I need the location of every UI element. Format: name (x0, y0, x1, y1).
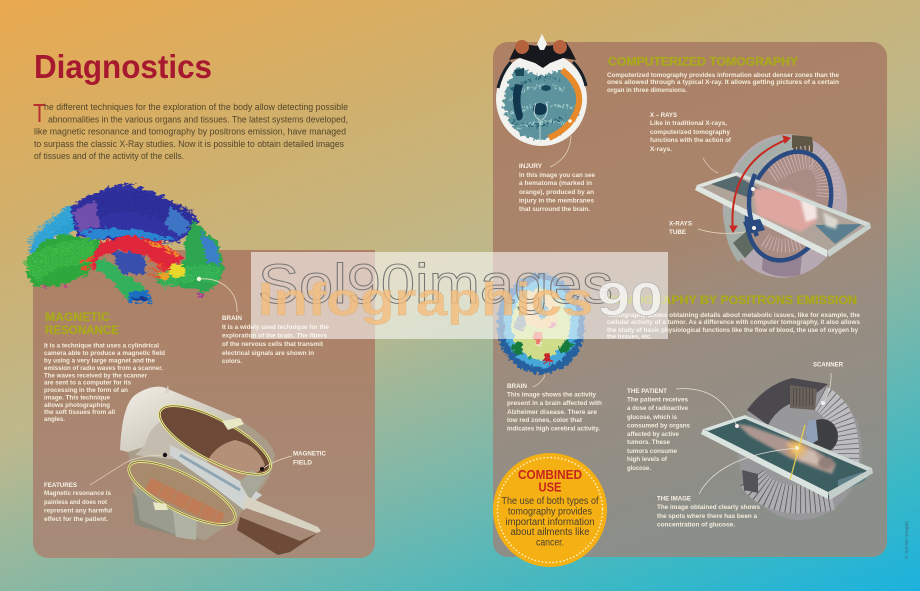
icon: CT brain scan (496, 34, 587, 146)
callout: combined use: The use of both types of (502, 496, 599, 507)
text: features: Magnetic resonance is (44, 490, 111, 497)
text: brain activity: low red zones, color that (507, 417, 583, 424)
text: the patient: consumed by organs (627, 422, 690, 430)
leader: brain activity (533, 375, 545, 387)
text: the image: The image obtained clearly shows (657, 504, 760, 511)
illustration: CT scanner (695, 126, 871, 286)
panel: magnetic resonance (33, 250, 375, 558)
text: injury: a hematoma (marked in (519, 180, 592, 187)
leader: brain (199, 279, 237, 312)
text: features: painless and does not (44, 499, 108, 506)
heading: magnetic resonance (45, 312, 119, 337)
text: the patient: tumors. These (627, 439, 670, 446)
callout: combined use: important information (506, 517, 594, 528)
text: injury (519, 163, 595, 213)
label: scanner: SCANNER (813, 362, 843, 368)
text: positrons emission description: Tomography allows obtaining details about metabolic issues, like for example, the (607, 312, 860, 319)
text: injury: orange), produced by an (519, 189, 594, 196)
text: brain note: BRAIN (222, 315, 242, 322)
intro text block: of tissues and of the activity of the cells. (34, 151, 184, 162)
text: the image (657, 496, 760, 528)
text: injury: INJURY (519, 163, 543, 170)
text: magnetic resonance description: processing in the form of an (44, 387, 128, 394)
text: positrons emission description: the study of basic physiological functions like the flow of blood, the use of oxygen by (607, 327, 858, 334)
illustration: PET scanner (676, 373, 873, 520)
text: brain note: electrical signals are shown in (222, 350, 314, 357)
text: features: FEATURES (44, 482, 78, 489)
text: computerized tomography description: ones allowed through a typical X-ray. It allows getting pictures of a certain (607, 79, 839, 86)
text: x-rays (650, 112, 732, 153)
text: positrons emission description (607, 312, 860, 340)
text: brain activity: present in a brain affected with (507, 400, 602, 407)
text: magnetic resonance description: It is a technique that uses a cylindrical (44, 342, 159, 350)
text: the patient: glucose, which is (627, 414, 677, 421)
text: computerized tomography description: Computerized tomography provides information about denser zones than the (607, 72, 839, 79)
text: the patient: a dose of radioactive (627, 405, 688, 412)
panel: tomography (493, 42, 887, 557)
heading: magnetic resonance: MAGNETIC (45, 312, 110, 324)
heading: tomography by positrons emission: TOMOGRAPHY BY POSITRONS EMISSION (607, 295, 857, 307)
text: x-rays: computerized tomography (650, 129, 730, 136)
text: x-rays: X-rays. (650, 146, 672, 153)
label: magnetic field: FIELD (293, 460, 312, 466)
text: magnetic resonance description: image. This technique (44, 394, 110, 402)
text: magnetic resonance description: angles. (44, 416, 65, 423)
text: x-rays: Like in traditional X-rays, (650, 120, 727, 127)
text: the image: THE IMAGE (657, 496, 692, 502)
text: brain activity: This image shows the activity (507, 392, 596, 398)
intro text block: to surpass the classic X-Ray studies. Now it is possible to obtain detailed images (34, 139, 344, 150)
callout: combined use: cancer. (536, 538, 564, 548)
title: Diagnostics (34, 48, 212, 85)
intro text block (33, 98, 348, 162)
heading: computerized tomography: COMPUTERIZED TOMOGRAPHY (608, 56, 798, 68)
text: the image: the spots where there has been a (657, 513, 757, 520)
leader: injury (550, 136, 571, 167)
text: injury: In this image you can see (519, 172, 595, 179)
text: magnetic resonance description: The waves received by the scanner (44, 372, 147, 380)
text: injury: that surround the brain. (519, 206, 590, 213)
text: magnetic resonance description: allows photographing (44, 402, 110, 409)
intro text block: T (33, 98, 46, 128)
text: the patient: tumors consume (627, 448, 677, 455)
icon: brain fibre tractography (27, 183, 224, 302)
text: brain note: It is a widely used technique for the (222, 324, 329, 331)
intro text block: he different techniques for the exploration of the body allow detecting possible (44, 102, 348, 113)
text: brain activity: indicates high cerebral activity. (507, 426, 600, 432)
text: magnetic resonance description: by using a very large magnet and the (44, 358, 155, 364)
text: brain activity (507, 383, 602, 432)
label: x-rays tube (669, 220, 693, 236)
illustration: MRI scanner (90, 385, 321, 555)
text: computerized tomography description: organ in three dimensions. (607, 87, 687, 94)
text: the image: concentration of glucose. (657, 522, 735, 528)
text: magnetic resonance description: are sent to a computer for its (44, 380, 131, 386)
watermark: Infographics (258, 273, 593, 325)
text: brain activity: Alzheimer disease. There are (507, 409, 597, 416)
text: features: effect for the patient. (44, 516, 108, 523)
text: positrons emission description: the tissues, etc. (607, 334, 652, 340)
text: the patient: glucose. (627, 465, 651, 472)
text: brain note: colors. (222, 358, 242, 365)
callout: combined use: USE (538, 480, 562, 494)
callout: combined use (493, 453, 607, 567)
text: brain note: exploration of the brain. The fibers (222, 332, 327, 340)
text: the patient: The patient receives (627, 396, 688, 404)
text: the patient: THE PATIENT (627, 388, 667, 395)
callout: combined use: COMBINED (518, 468, 582, 482)
text: brain note (222, 315, 329, 365)
text: features (44, 482, 112, 523)
icon: brain dot (197, 277, 201, 281)
text: magnetic resonance description (44, 342, 165, 423)
label: magnetic field (293, 450, 326, 466)
watermark: 90 (597, 273, 663, 325)
text: features: represent any harmful (44, 508, 112, 514)
callout: combined use: about ailments like (510, 527, 590, 538)
watermark: Sol90images (258, 252, 613, 315)
label: x-rays tube: TUBE (669, 229, 687, 236)
text: the patient: high levels of (627, 456, 668, 463)
text: the patient (627, 388, 690, 472)
credit: © Sol 90 Images (903, 520, 909, 559)
intro text block: like magnetic resonance and tomography by positrons emission, have managed (34, 126, 346, 138)
text: magnetic resonance description: emission of radio waves from a scanner. (44, 365, 163, 372)
text: the patient: affected by active (627, 431, 679, 438)
text: positrons emission description: cellular activity of a tumor. As a difference with computer tomography, it also allows (607, 319, 860, 326)
intro text block: abnormalities in the various organs and tissues. The latest systems developed, (48, 114, 348, 126)
text: magnetic resonance description: the soft tissues from all (44, 409, 115, 416)
label: magnetic field: MAGNETIC (293, 450, 326, 458)
heading: magnetic resonance: RESONANCE (45, 325, 119, 337)
text: x-rays: functions with the action of (650, 137, 732, 144)
text: brain activity: BRAIN (507, 383, 527, 390)
text: magnetic resonance description: camera able to produce a magnetic field (44, 350, 165, 357)
text: computerized tomography description (607, 72, 839, 94)
text: x-rays: X – RAYS (650, 112, 678, 119)
text: brain note: of the nervous cells that transmit (222, 341, 324, 348)
text: injury: injury in the membranes (519, 198, 594, 204)
callout: combined use: tomography provides (508, 506, 592, 518)
label: x-rays tube: X-RAYS (669, 220, 693, 228)
icon: PET brain scan (497, 272, 585, 374)
watermark (251, 252, 668, 339)
